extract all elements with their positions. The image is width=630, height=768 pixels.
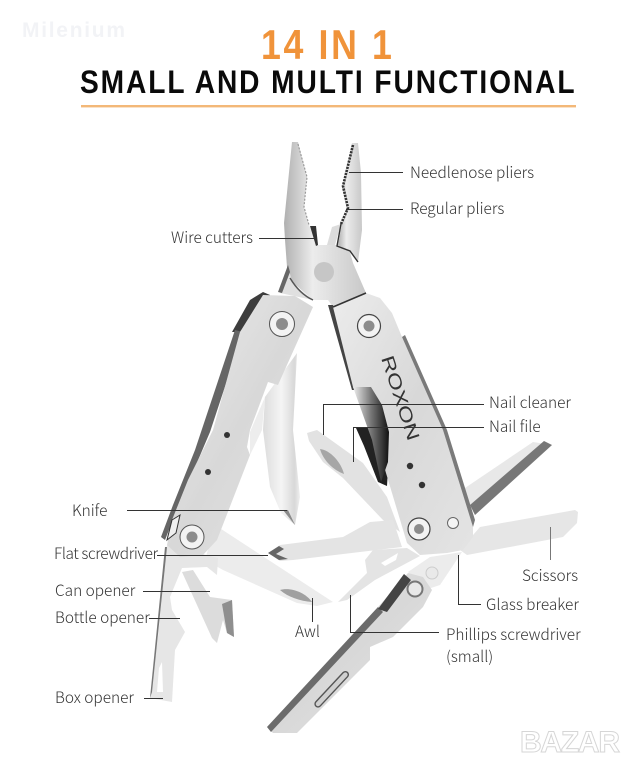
tool: nail cleaner and nail file: [307, 428, 400, 532]
right handle: [328, 293, 475, 555]
right handle top screw: [358, 314, 380, 338]
label: Wire cutters: Wire cutters: [171, 226, 253, 248]
tool: scissors lower blade: [460, 510, 578, 555]
watermark: Milenium: Milenium: [22, 19, 125, 42]
label: Phillips screwdriver (small): (small): [446, 645, 493, 667]
label: Bottle opener: Bottle opener: [55, 606, 150, 628]
logo: ROXON: ROXON: [377, 353, 423, 443]
pliers pivot: [314, 262, 334, 282]
label: Phillips screwdriver (small): [350, 595, 581, 667]
label: Flat screwdriver: Flat screwdriver: [54, 542, 158, 564]
left handle bottom screw: [180, 525, 204, 549]
multitool illustration: [150, 142, 578, 733]
label: Nail cleaner: Nail cleaner: [489, 391, 571, 413]
scissors pivot link: [408, 552, 462, 590]
tool: small phillips screwdriver: [338, 548, 420, 602]
tool: scissors upper blade: [462, 441, 552, 515]
label: Regular pliers: Regular pliers: [410, 197, 504, 219]
label: Can opener: Can opener: [55, 579, 136, 601]
label: Glass breaker: [458, 555, 579, 615]
label: Needlenose pliers: Needlenose pliers: [410, 161, 534, 183]
left handle: [161, 292, 313, 557]
label: Scissors: [522, 527, 578, 586]
label: Nail file: Nail file: [489, 415, 541, 437]
tool: large file blade: [267, 567, 438, 733]
tool: knife blade: [250, 353, 300, 525]
tool: bottle opener and box opener: [150, 545, 218, 702]
tool: flat screwdriver: [268, 520, 402, 561]
right handle bottom screw: [408, 518, 430, 540]
label: Knife: Knife: [72, 499, 107, 521]
label: Nail cleaner: [324, 391, 571, 435]
label: Glass breaker: Glass breaker: [486, 593, 579, 615]
subtitle: SMALL AND MULTI FUNCTIONAL: [80, 65, 575, 100]
label: Nail file: [354, 415, 541, 462]
left handle top screw: [270, 312, 294, 336]
watermark: Bazar: BAZAR: [520, 726, 620, 759]
pliers head: [278, 142, 366, 307]
tool: awl: [205, 525, 333, 606]
label: Scissors: Scissors: [522, 564, 578, 586]
tool: can opener: [182, 570, 234, 643]
label: Awl: Awl: [295, 620, 320, 642]
glass breaker hole: [448, 518, 458, 528]
label: Phillips screwdriver (small): Phillips screwdriver: [446, 623, 581, 645]
orange divider: [81, 105, 576, 107]
label: Box opener: Box opener: [55, 686, 134, 708]
label: Awl: [295, 598, 320, 642]
title: 14 in 1: 14 IN 1: [261, 22, 392, 69]
